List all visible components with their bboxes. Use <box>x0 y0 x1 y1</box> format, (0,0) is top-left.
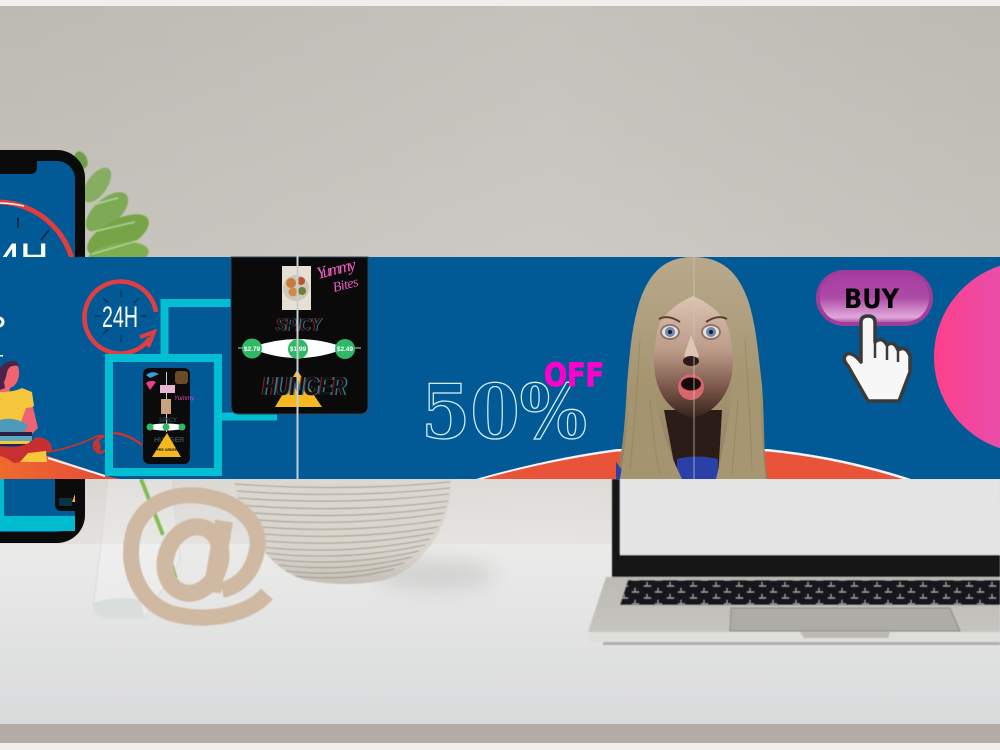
cyan connector frame <box>109 303 277 472</box>
HUNGER text: HUNGER <box>264 371 348 401</box>
face <box>654 296 733 418</box>
hair strands lower <box>620 385 682 479</box>
hand cursor icon <box>844 316 910 401</box>
phone clock graphic <box>0 202 75 358</box>
woven bowl <box>233 479 452 584</box>
glass vase with green stem <box>93 479 180 619</box>
neon script: Yummy <box>314 255 358 283</box>
left partial glyphs <box>0 318 3 356</box>
neon script: Bites <box>331 275 361 296</box>
small phone thumbnail: HUNGER <box>154 437 184 444</box>
price slider: $2.79 <box>244 346 261 353</box>
eyes <box>659 317 727 340</box>
small phone thumbnail <box>143 368 195 464</box>
large black phone crop <box>231 255 368 414</box>
laptop <box>588 479 1000 645</box>
open mouth <box>678 374 704 400</box>
yellow triangle <box>275 370 322 407</box>
50% outlined text: 50% <box>421 368 587 456</box>
phone screen bottom with cyan frame <box>0 477 75 531</box>
plant leaves behind the phone <box>72 149 155 274</box>
BUY button <box>816 270 933 326</box>
orange hill right with white edge <box>476 449 911 479</box>
neon script <box>314 255 361 296</box>
bowl shadow <box>375 559 495 591</box>
red ribbon <box>48 433 142 453</box>
BUY button: BUY <box>844 284 899 315</box>
surprised woman photo <box>616 257 768 479</box>
SPICY text: SPICY <box>276 315 323 335</box>
illustrated person with books <box>0 361 52 463</box>
pink circle <box>934 261 1000 453</box>
SPICY text: SPICY <box>275 315 322 335</box>
food photo <box>282 266 311 310</box>
price slider <box>238 338 361 359</box>
HUNGER text: HUNGER <box>261 371 345 401</box>
SPICY text: SPICY <box>277 315 324 335</box>
phone notch <box>0 158 37 174</box>
small phone thumbnail: PRE ORDER <box>157 448 178 452</box>
24H clock icon: 24H <box>102 301 138 334</box>
orange hill left <box>0 452 120 479</box>
price slider: $1.99 <box>290 346 307 353</box>
small phone thumbnail: Yummy <box>174 396 195 402</box>
nose <box>684 335 699 361</box>
HUNGER text: HUNGER <box>262 371 346 401</box>
seam line <box>296 254 298 480</box>
OFF magenta text: OFF <box>544 356 604 394</box>
wooden at-sign ornament <box>131 495 267 617</box>
main blue banner <box>0 257 1000 479</box>
price slider: $2.49 <box>337 346 354 353</box>
small phone thumbnail: SPICY <box>159 418 177 424</box>
smartphone mockup upper part <box>0 150 85 543</box>
24H clock icon <box>84 281 156 353</box>
